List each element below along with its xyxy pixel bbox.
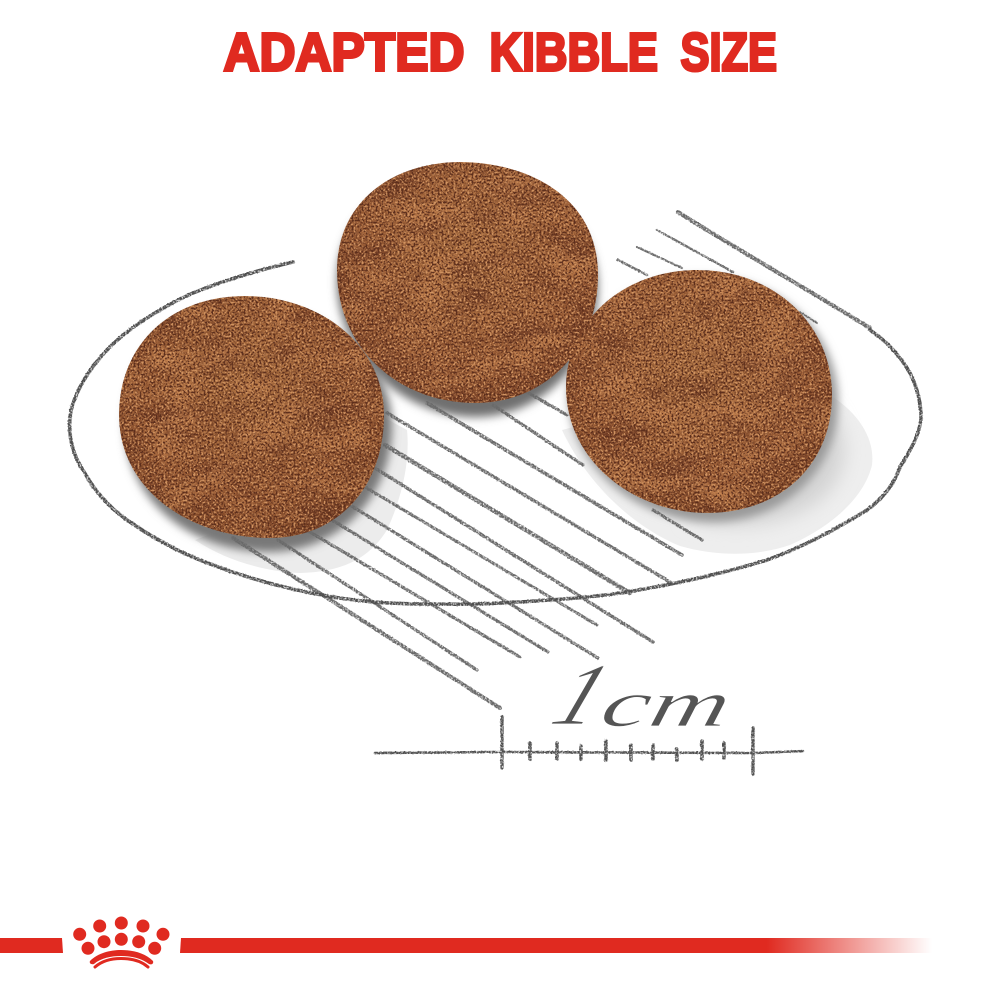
ruler (375, 717, 803, 774)
illustration: kibbles on a sketched plate (70, 162, 921, 708)
handwritten label: 1cm (540, 645, 739, 743)
hatch lines (233, 212, 870, 708)
title: SIZE (680, 22, 777, 82)
icon: crown logo (73, 916, 170, 967)
title: KIBBLE (490, 22, 658, 82)
kibble: left (119, 296, 384, 538)
title (224, 22, 777, 82)
shadows on plate (125, 174, 872, 573)
plate outline (70, 262, 921, 604)
title: ADAPTED (224, 22, 464, 82)
kibble: top (337, 162, 598, 403)
handwritten label: 1cm: 1 (540, 645, 624, 743)
kibble: right (566, 270, 832, 513)
handwritten label: 1cm: cm (595, 667, 739, 741)
footer bar: right segment fading out (180, 938, 932, 953)
footer bar: left segment (0, 938, 63, 953)
